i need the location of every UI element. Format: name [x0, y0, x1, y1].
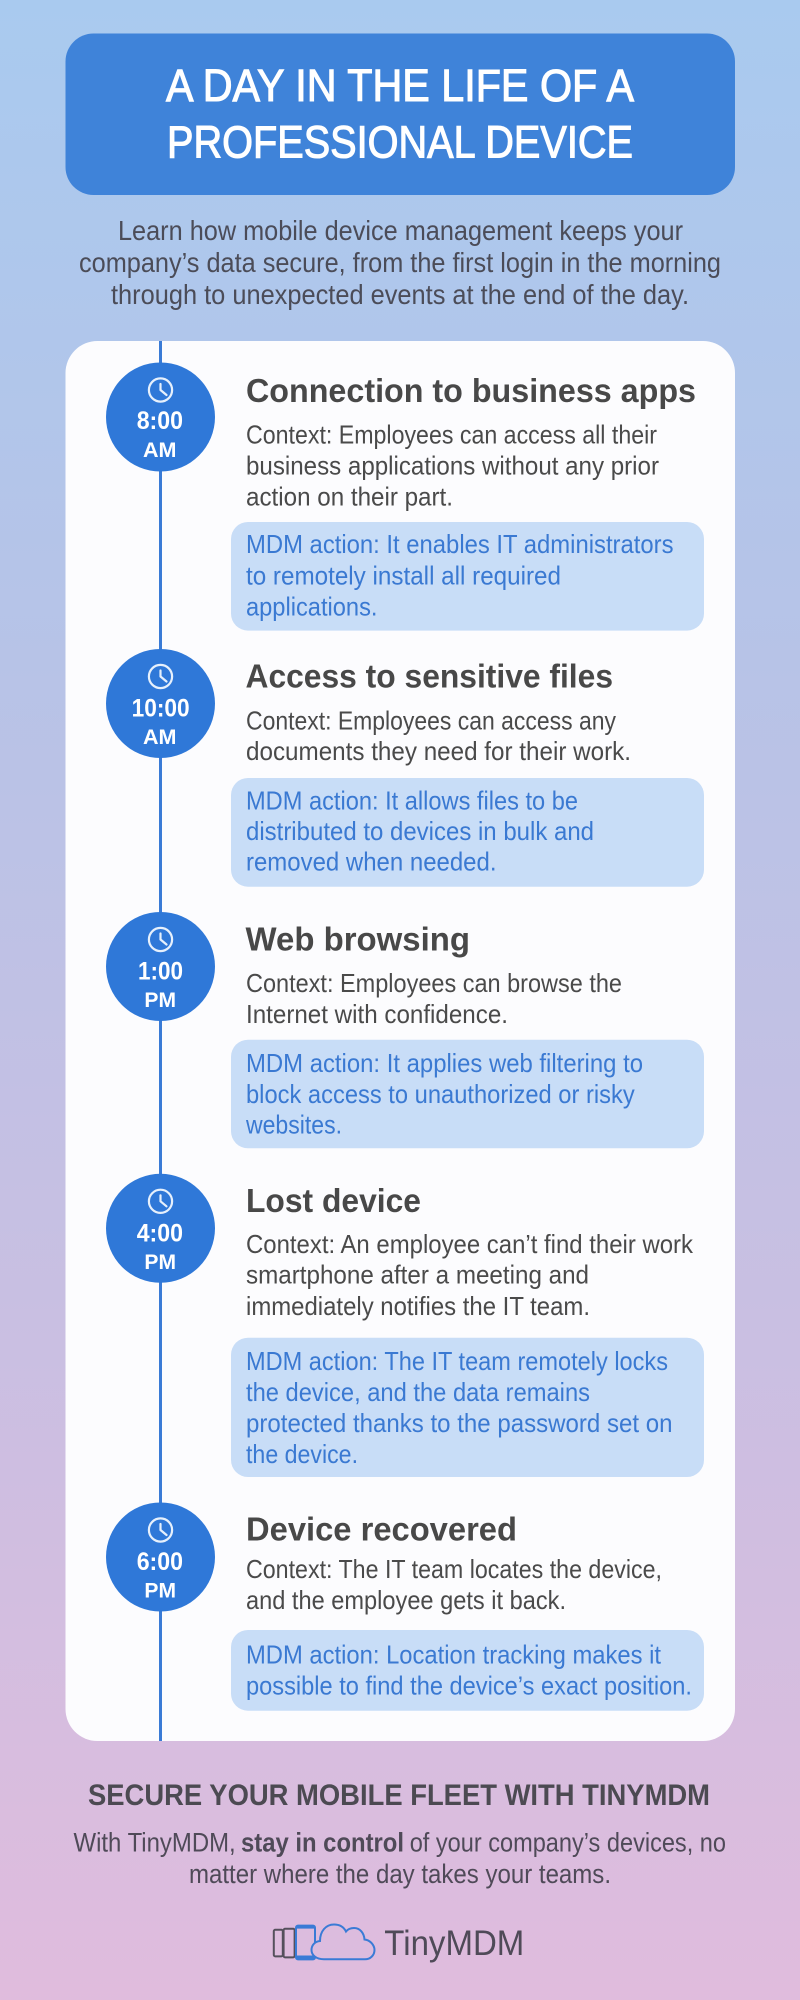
MDM action callout: the device, and the data remains — [246, 1377, 590, 1407]
context text: Context: Employees can access all their — [246, 420, 657, 450]
MDM action callout — [231, 522, 704, 631]
title banner — [66, 34, 735, 195]
intro text: through to unexpected events at the end of the day. — [111, 279, 689, 310]
context text: Context: Employees can browse the — [246, 968, 622, 998]
MDM action callout: the device. — [246, 1439, 358, 1469]
time badge: 8:00 AM — [106, 362, 215, 472]
context text: and the employee gets it back. — [246, 1585, 566, 1615]
context text: smartphone after a meeting and — [246, 1260, 589, 1290]
context text: Context: Employees can access any — [246, 705, 616, 735]
MDM action callout: block access to unauthorized or risky — [246, 1079, 635, 1109]
MDM action callout — [231, 1630, 704, 1711]
wordmark: TinyMDM — [384, 1924, 524, 1963]
time badge: 1:00 PM — [106, 912, 215, 1021]
context text — [246, 968, 622, 1029]
heading: Lost device — [246, 1182, 421, 1219]
context text: Context: The IT team locates the device, — [246, 1554, 662, 1584]
MDM action callout: possible to find the device’s exact position. — [246, 1671, 692, 1701]
MDM action callout: MDM action: It allows files to be — [246, 785, 578, 815]
heading: Device recovered — [246, 1511, 517, 1548]
time badge: 4:00 PM: PM — [144, 1250, 176, 1274]
MDM action callout: websites. — [245, 1110, 342, 1140]
MDM action callout: distributed to devices in bulk and — [246, 816, 594, 846]
MDM action callout: applications. — [246, 592, 378, 622]
time badge: 4:00 PM — [106, 1174, 215, 1283]
MDM action callout: to remotely install all required — [246, 560, 561, 590]
logo: TinyMDM — [274, 1924, 524, 1963]
title banner: PROFESSIONAL DEVICE — [167, 116, 633, 168]
context text: business applications without any prior — [246, 450, 659, 480]
time badge: 6:00 PM: 6:00 — [137, 1548, 183, 1576]
MDM action callout: MDM action: It applies web filtering to — [246, 1048, 643, 1078]
time badge: 10:00 AM: 10:00 — [132, 694, 190, 722]
context text — [246, 1229, 694, 1321]
intro text — [79, 215, 721, 310]
MDM action callout — [231, 1040, 704, 1148]
panel: timeline — [66, 341, 735, 1741]
context text: Context: An employee can’t find their work — [246, 1229, 694, 1259]
MDM action callout: removed when needed. — [246, 847, 496, 877]
time badge: 10:00 AM — [106, 649, 215, 758]
title banner: A DAY IN THE LIFE OF A — [166, 60, 635, 111]
context text: Internet with confidence. — [246, 999, 508, 1029]
time badge: 1:00 PM: PM — [144, 988, 176, 1012]
context text — [246, 1554, 662, 1615]
footer text — [74, 1828, 726, 1889]
section: connection to business apps — [106, 362, 704, 631]
footer text: matter where the day takes your teams. — [189, 1859, 611, 1889]
heading: Access to sensitive files — [246, 658, 613, 695]
MDM action callout — [231, 778, 704, 887]
MDM action callout: protected thanks to the password set on — [246, 1408, 672, 1438]
footer text: of your company’s devices, no — [410, 1828, 726, 1858]
context text: immediately notifies the IT team. — [246, 1291, 590, 1321]
context text — [246, 705, 631, 766]
time badge: 6:00 PM: PM — [144, 1578, 176, 1602]
section: web browsing — [106, 912, 704, 1148]
MDM action callout: MDM action: The IT team remotely locks — [246, 1346, 668, 1376]
footer heading: SECURE YOUR MOBILE FLEET WITH TINYMDM — [88, 1779, 710, 1812]
time badge: 10:00 AM: AM — [143, 725, 176, 749]
icon: devices and cloud — [274, 1924, 374, 1960]
footer text: With TinyMDM, — [74, 1828, 236, 1858]
intro text: Learn how mobile device management keeps your — [118, 215, 683, 246]
section: access to sensitive files — [106, 649, 704, 887]
context text: action on their part. — [246, 481, 453, 511]
time badge: 8:00 AM: 8:00 — [137, 407, 183, 435]
intro text: company’s data secure, from the first login in the morning — [79, 247, 721, 278]
time badge: 1:00 PM: 1:00 — [138, 958, 183, 986]
context text — [246, 420, 659, 511]
heading: Web browsing — [246, 921, 470, 958]
time badge: 6:00 PM — [106, 1502, 215, 1612]
time badge: 8:00 AM: AM — [143, 438, 176, 462]
time badge: 4:00 PM: 4:00 — [137, 1219, 183, 1247]
section: lost device — [106, 1174, 704, 1477]
context text: documents they need for their work. — [246, 736, 631, 766]
heading: Connection to business apps — [246, 372, 696, 409]
section: device recovered — [106, 1502, 704, 1711]
MDM action callout — [231, 1338, 704, 1477]
MDM action callout: MDM action: It enables IT administrators — [246, 529, 674, 559]
footer text: stay in control — [241, 1828, 404, 1858]
MDM action callout: MDM action: Location tracking makes it — [246, 1640, 662, 1670]
